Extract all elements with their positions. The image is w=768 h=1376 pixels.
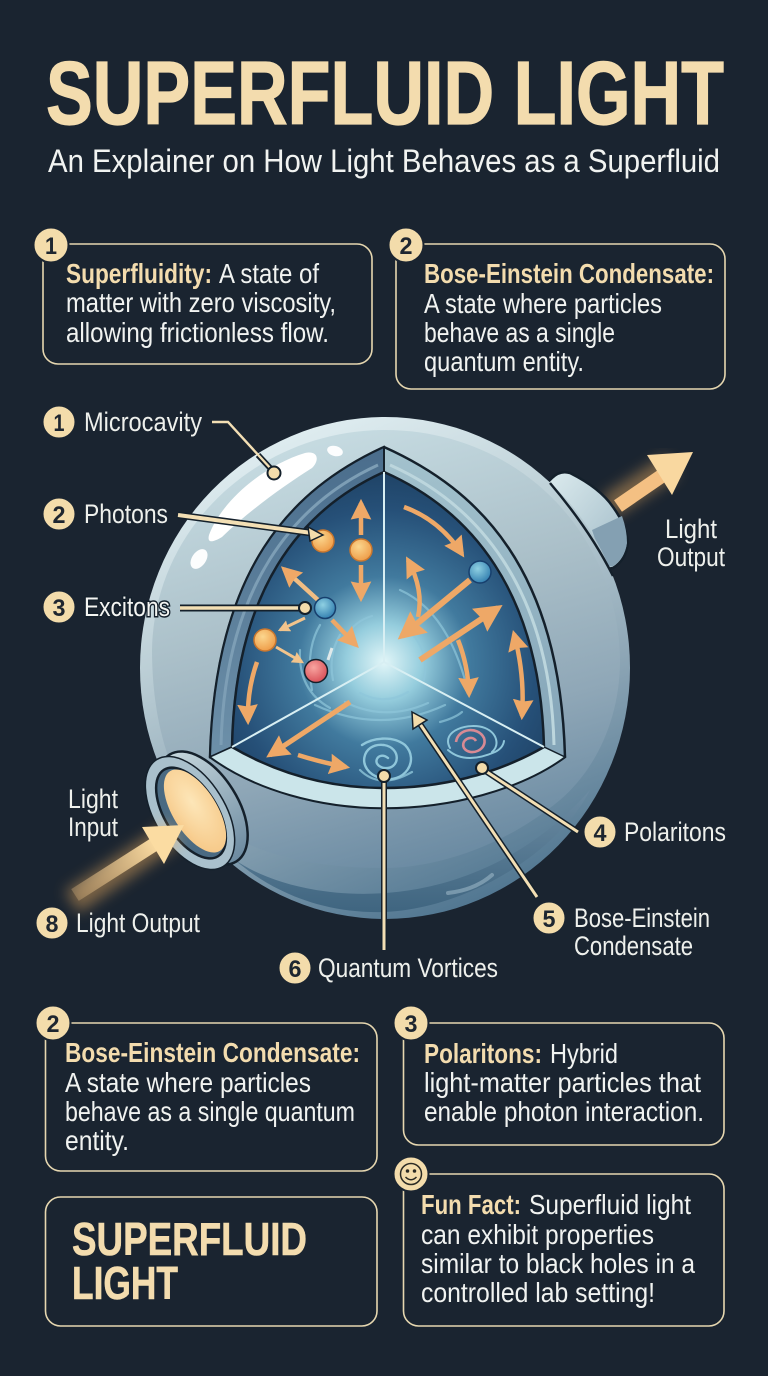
sphere lower crescent <box>235 790 590 912</box>
port barrel <box>140 736 266 880</box>
highlight spot lower <box>187 546 211 572</box>
label: bose-einstein condensate: 5 <box>542 906 556 933</box>
panel: polaritons <box>394 1006 724 1145</box>
arrow glow <box>72 832 175 902</box>
cutaway wedge <box>210 447 565 808</box>
panel: bose-einstein condensate bottom: Bose-Einstein Condensate: <box>65 1037 360 1068</box>
label: bose-einstein condensate: Bose-Einstein <box>574 903 710 933</box>
subtitle: An Explainer on How Light Behaves as a Superfluid <box>48 143 720 179</box>
panel: superfluidity: Superfluidity: <box>66 258 212 289</box>
panel: polaritons: 3 <box>404 1011 418 1038</box>
input arrow <box>75 842 158 895</box>
particle arrows <box>248 503 523 767</box>
label: excitons <box>42 590 311 624</box>
wedge inner well <box>232 472 544 788</box>
particles: photons, excitons, polaritons <box>254 530 491 682</box>
panel: bose-einstein condensate top <box>388 228 725 389</box>
label: light output eight <box>36 906 200 940</box>
panel: superfluidity: 1 <box>45 233 57 260</box>
arrow: light output <box>608 452 693 507</box>
sphere edge line by port <box>550 483 613 576</box>
label: light output eight: 8 <box>46 911 58 938</box>
port glow <box>151 759 239 863</box>
diagram: microcavity sphere <box>140 417 630 919</box>
left wall <box>210 447 384 757</box>
label: polaritons: 4 <box>594 820 607 847</box>
swirl rings <box>300 590 465 722</box>
panel: superfluidity: matter with zero viscosity, <box>66 287 336 318</box>
label: excitons: 3 <box>52 595 66 622</box>
lower reflection <box>448 875 492 893</box>
label: photons: Photons <box>84 499 168 529</box>
panel: bose-einstein condensate bottom <box>36 1006 377 1171</box>
label: light output right <box>657 514 725 572</box>
panel: bose-einstein condensate bottom: 2 <box>46 1011 60 1038</box>
label: light output right: Light <box>665 514 717 544</box>
panel: fun fact: Fun Fact: <box>421 1189 521 1220</box>
label: quantum vortices <box>278 770 498 984</box>
label: microcavity: Microcavity <box>84 407 202 437</box>
label: light output eight: Light Output <box>76 908 200 938</box>
panel: superfluid light wordmark: SUPERFLUID <box>72 1213 307 1265</box>
panel: fun fact: controlled lab setting! <box>421 1277 655 1308</box>
panel: fun fact: similar to black holes in a <box>421 1248 695 1279</box>
left wall stripe <box>221 465 378 745</box>
label: photons <box>42 498 323 541</box>
label: polaritons: Polaritons <box>624 817 726 847</box>
panel: polaritons: enable photon interaction. <box>424 1096 704 1127</box>
panel: superfluid light wordmark <box>46 1197 377 1326</box>
label: bose-einstein condensate <box>412 712 710 961</box>
label: light output right: Output <box>657 542 725 572</box>
sphere body <box>140 417 630 919</box>
label: microcavity <box>42 406 280 480</box>
panel: bose-einstein condensate bottom: entity. <box>65 1125 129 1156</box>
wedge outer shell <box>210 447 565 808</box>
panel: bose-einstein condensate top: behave as a single <box>424 317 615 348</box>
panel: fun fact: can exhibit properties <box>421 1219 654 1250</box>
label: bose-einstein condensate: Condensate <box>574 931 693 961</box>
wedge seams <box>232 472 544 747</box>
bottom wall <box>210 747 565 808</box>
sphere highlight <box>209 452 317 541</box>
vortex blue <box>360 739 412 781</box>
label: light input: Input <box>68 812 118 842</box>
icon: output port <box>548 472 628 570</box>
panel: fun fact <box>394 1156 724 1326</box>
label: light input <box>68 784 118 842</box>
panel: bose-einstein condensate bottom: behave as a single quantum <box>65 1096 355 1127</box>
label: photons: 2 <box>52 502 66 529</box>
panel: superfluid light wordmark: LIGHT <box>72 1257 178 1309</box>
label: light input: Light <box>68 784 118 814</box>
highlight spot upper <box>326 444 344 458</box>
panel: bose-einstein condensate top: A state where particles <box>424 288 662 319</box>
sphere inner shading <box>152 430 620 868</box>
label: polaritons <box>476 762 726 848</box>
label: quantum vortices: 6 <box>288 956 302 983</box>
label: excitons: Excitons <box>84 592 170 622</box>
panel: fun fact: Superfluid light <box>529 1189 691 1220</box>
input port with arrow <box>72 736 266 902</box>
port ring <box>127 741 253 885</box>
vortex polariton <box>448 726 504 758</box>
panel: polaritons: Hybrid <box>550 1038 618 1069</box>
panel: superfluidity: A state of <box>219 258 319 289</box>
label: quantum vortices: Quantum Vortices <box>318 953 498 983</box>
right wall stripe <box>390 465 554 745</box>
panel: bose-einstein condensate bottom: A state where particles <box>65 1067 311 1098</box>
panel: superfluidity: allowing frictionless flow. <box>66 317 329 348</box>
panel: superfluidity <box>34 228 372 364</box>
panel: polaritons: Polaritons: <box>424 1038 542 1069</box>
icon: smiley <box>400 1164 422 1184</box>
panel: polaritons: light-matter particles that <box>424 1067 701 1098</box>
panel: bose-einstein condensate top: 2 <box>400 233 412 260</box>
panel: bose-einstein condensate top: quantum entity. <box>424 346 584 377</box>
port opening <box>142 756 240 870</box>
label: microcavity: 1 <box>54 410 64 437</box>
